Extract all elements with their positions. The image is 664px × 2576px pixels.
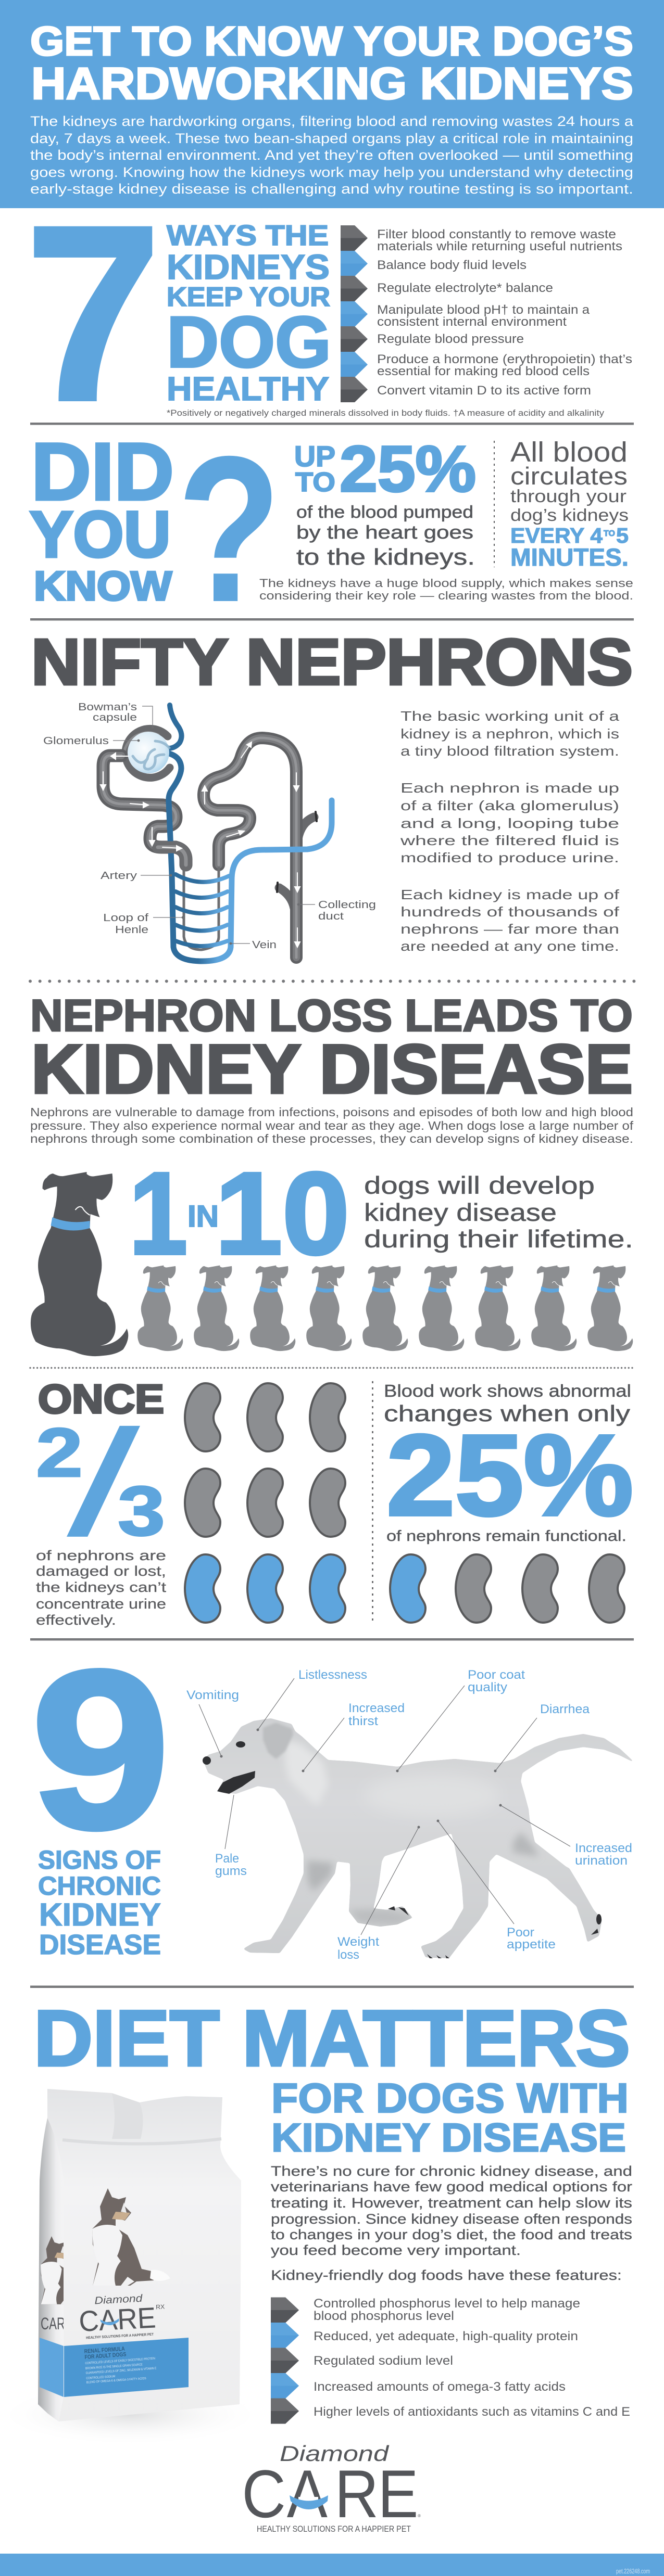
sign labels: Increased <box>348 1701 405 1715</box>
list of kidney functions: Regulate blood pressure <box>377 332 524 346</box>
blood work text: Blood work shows abnormal <box>384 1381 631 1400</box>
list of kidney functions: consistent internal environment <box>377 315 567 329</box>
nephron loss paragraph: pressure. They also experience normal wear and tear as they age. When dogs lose a large number of <box>30 1119 634 1132</box>
nephron loss paragraph: nephrons through some combination of these processes, they can develop signs of kidney disease. <box>30 1132 633 1145</box>
nephron loss paragraph: Nephrons are vulnerable to damage from infections, poisons and episodes of both low and high blood <box>30 1105 633 1119</box>
caption: nephrons damaged: concentrate urine <box>36 1596 166 1612</box>
stat: up to 25%: TO <box>295 467 335 498</box>
caption: nephrons damaged: effectively. <box>36 1612 116 1628</box>
heading: ways the kidneys keep your dog healthy <box>167 219 331 407</box>
stat caption: by the heart goes <box>296 521 473 543</box>
sign labels: Listlessness <box>298 1668 367 1682</box>
subheading: KIDNEY DISEASE <box>271 2115 626 2160</box>
caption: nephrons damaged: damaged or lost, <box>36 1563 166 1579</box>
stat: all blood circulates: through your <box>510 487 627 506</box>
stat: up to 25% <box>294 433 476 570</box>
diagram labels: Loop of <box>103 912 149 924</box>
heading: diet matters: DIET MATTERS <box>34 1994 630 2083</box>
subheading: FOR DOGS WITH <box>271 2075 629 2121</box>
bag side dog photo <box>41 2236 64 2304</box>
heading: once: ONCE <box>38 1376 164 1422</box>
big number 7: 7 <box>25 173 161 453</box>
header banner <box>0 0 664 208</box>
heading: ways the kidneys keep your dog healthy: KIDNEYS <box>167 248 330 287</box>
sign labels: quality <box>468 1680 507 1694</box>
stat: 1 in 10: IN <box>187 1200 219 1233</box>
diet paragraph: progression. Since kidney disease often responds <box>271 2211 632 2227</box>
diet paragraph: There’s no cure for chronic kidney disease, and <box>271 2163 632 2179</box>
intro paragraph: goes wrong. Knowing how the kidneys work may help you understand why detecting <box>30 164 633 180</box>
caption: nephrons damaged <box>36 1548 167 1628</box>
diet paragraph: treating it. However, treatment can help slow its <box>271 2195 632 2211</box>
nephron description: of a filter (aka glomerulus) <box>400 798 619 813</box>
bag blue label: CONTROLLED SODIUM <box>86 2375 115 2380</box>
intro paragraph: The kidneys are hardworking organs, filtering blood and removing wastes 24 hours a <box>30 113 634 129</box>
nephron description: modified to produce urine. <box>400 850 619 865</box>
stat: all blood circulates: TO <box>604 529 615 538</box>
dog eye, nose and paws <box>203 1741 602 1958</box>
caption: nephrons damaged: of nephrons are <box>36 1548 166 1563</box>
blood supply note: The kidneys have a huge blood supply, which makes sense <box>259 577 633 590</box>
flow arrows <box>101 742 300 947</box>
watermark: pet.226248.com <box>616 2567 650 2575</box>
diagram leader dots <box>137 726 299 945</box>
stat caption: during their lifetime. <box>364 1225 633 1253</box>
caption: nephrons damaged: the kidneys can’t <box>36 1579 167 1595</box>
stat: all blood circulates: EVERY 4 <box>510 524 603 547</box>
blood supply note <box>259 577 633 602</box>
sign leader lines <box>199 1678 570 1935</box>
arrow column <box>271 2297 299 2424</box>
stat caption: of nephrons remain functional. <box>386 1528 627 1545</box>
heading: signs of chronic kidney disease <box>38 1845 161 1960</box>
dog mouth <box>217 1771 255 1794</box>
list of diet features: Higher levels of antioxidants such as vitamins C and E <box>314 2405 630 2419</box>
bag blue label: RENAL FORMULA <box>84 2346 125 2355</box>
panel: nine signs <box>37 1668 632 1959</box>
diagram labels: capsule <box>93 712 137 723</box>
nephron description: where the filtered fluid is <box>400 833 619 848</box>
list of kidney functions <box>377 227 632 398</box>
nephron description: Each nephron is made up <box>400 780 619 796</box>
blood vessels <box>158 705 332 961</box>
stat: all blood circulates: All blood <box>510 437 628 468</box>
nephron description: kidney is a nephron, which is <box>400 726 619 742</box>
fraction: two thirds: 3 <box>118 1472 165 1550</box>
brand logo: HEALTHY SOLUTIONS FOR A HAPPIER PET <box>257 2524 411 2534</box>
fraction: two thirds: 2 <box>36 1414 83 1491</box>
sign labels: appetite <box>507 1937 556 1952</box>
nephron description: hundreds of thousands of <box>400 904 620 920</box>
arrow column <box>341 225 368 402</box>
sign labels: Poor coat <box>468 1668 525 1682</box>
bag side logo: CARE <box>41 2314 73 2333</box>
sign labels: Diarrhea <box>540 1702 590 1716</box>
list of kidney functions: Convert vitamin D to its active form <box>377 384 591 398</box>
stat: all blood circulates: dog’s kidneys <box>510 505 629 525</box>
stat: all blood circulates <box>510 437 629 571</box>
sign labels: Vomiting <box>186 1688 239 1702</box>
bag blue label: GUARANTEED LEVELS OF ZINC, SELENIUM & VITAMIN E <box>86 2367 157 2375</box>
icon: large dark dog <box>31 1172 128 1356</box>
brand logo: Diamond <box>280 2441 390 2466</box>
list of kidney functions: Produce a hormone (erythropoietin) that’s <box>377 352 632 366</box>
diagram labels: duct <box>318 911 344 922</box>
sign labels: loss <box>337 1948 359 1962</box>
list of kidney functions: Manipulate blood pH† to maintain a <box>377 303 590 317</box>
intro paragraph <box>30 113 634 197</box>
heading: signs of chronic kidney disease: KIDNEY <box>39 1897 161 1932</box>
blood work text: changes when only <box>384 1401 630 1426</box>
intro paragraph: the body’s internal environment. And yet they’re often overlooked — until something <box>30 147 633 163</box>
list of diet features: blood phosphorus level <box>314 2309 454 2323</box>
footnote: *Positively or negatively charged minerals dissolved in body fluids. †A measure of acidity and alkalinity <box>167 408 605 418</box>
panel: diet matters <box>0 1994 632 2534</box>
bag blue label <box>40 2338 189 2397</box>
stat: up to 25%: UP <box>294 440 335 473</box>
list of kidney functions: Regulate electrolyte* balance <box>377 281 553 295</box>
diagram leader lines <box>113 706 315 943</box>
dog shading <box>263 1723 539 1925</box>
fraction: two thirds <box>36 1399 165 1567</box>
blood supply note: considering their key role — clearing wastes from the blood. <box>259 589 633 602</box>
sign labels <box>186 1668 632 1962</box>
heading: did you know <box>30 427 174 609</box>
nephron description: The basic working unit of a <box>400 708 620 724</box>
glomerulus <box>128 732 169 773</box>
big number 9: 9 <box>31 1623 170 1876</box>
heading: did you know: YOU <box>30 499 171 571</box>
title: GET TO KNOW YOUR DOG’S <box>30 18 633 64</box>
heading: ways the kidneys keep your dog healthy: DOG <box>167 302 331 382</box>
stat: all blood circulates: MINUTES. <box>510 543 629 571</box>
intro paragraph: early-stage kidney disease is challenging and why routine testing is so important. <box>30 181 633 197</box>
dog photo <box>203 1718 635 1958</box>
bag blue label: BLEND OF OMEGA-6 & OMEGA-3 FATTY ACIDS <box>86 2377 146 2384</box>
nephron description <box>400 708 620 954</box>
list of diet features: Reduced, yet adequate, high-quality protein <box>314 2329 578 2343</box>
subheading <box>271 2075 629 2160</box>
list of diet features: Controlled phosphorus level to help manage <box>314 2297 580 2311</box>
stat: 1 in 10 <box>129 1149 349 1279</box>
nephron description: are needed at any one time. <box>400 938 619 954</box>
bag logo: Diamond <box>94 2293 143 2306</box>
product bag <box>38 2089 241 2430</box>
heading: nephron loss leads to kidney disease: NEPHRON LOSS LEADS TO <box>30 991 633 1041</box>
heading: did you know: KNOW <box>34 563 172 609</box>
big question mark: ? <box>177 413 281 645</box>
sign labels: Pale <box>215 1852 239 1866</box>
nephron diagram <box>101 705 332 961</box>
heading: did you know: DID <box>31 427 174 517</box>
panel: nifty nephrons <box>31 626 633 961</box>
stat caption: kidney disease <box>364 1198 557 1226</box>
diagram labels: Vein <box>252 939 277 951</box>
nephron description: Each kidney is made up of <box>400 887 620 902</box>
icon row: nine grey dogs <box>137 1266 633 1351</box>
title: HARDWORKING KIDNEYS <box>31 59 633 109</box>
intro paragraph: day, 7 days a week. These two bean-shaped organs play a critical role in maintaining <box>30 131 633 146</box>
stat: up to 25%: 25% <box>340 433 476 505</box>
diet paragraph <box>271 2163 632 2283</box>
stat caption: of the blood pumped <box>296 502 473 521</box>
title <box>30 18 633 109</box>
tubules <box>103 729 317 958</box>
sign labels: gums <box>215 1864 247 1878</box>
list of diet features: Increased amounts of omega-3 fatty acids <box>314 2380 566 2394</box>
heading: ways the kidneys keep your dog healthy: WAYS THE <box>167 219 329 251</box>
footer band <box>0 2554 664 2576</box>
sign labels: urination <box>575 1854 628 1868</box>
heading: signs of chronic kidney disease: CHRONIC <box>38 1871 161 1901</box>
diagram labels: Henle <box>115 924 148 936</box>
heading: ways the kidneys keep your dog healthy: HEALTHY <box>167 370 329 407</box>
diet paragraph: to changes in your dog’s diet, the food and treats <box>271 2227 632 2242</box>
bag logo: HEALTHY SOLUTIONS FOR A HAPPIER PET <box>86 2333 154 2340</box>
stat: 1 in 10: 10 <box>215 1149 349 1279</box>
heading: nifty nephrons: NIFTY NEPHRONS <box>31 626 633 698</box>
diet paragraph: you feed become very important. <box>271 2242 521 2258</box>
diet paragraph: Kidney-friendly dog foods have these features: <box>271 2267 622 2283</box>
stat: all blood circulates: 5 <box>616 524 629 547</box>
blood work text <box>384 1381 631 1426</box>
nephron description: nephrons — far more than <box>400 921 619 937</box>
heading: signs of chronic kidney disease: DISEASE <box>39 1929 161 1960</box>
nephron description: and a long, looping tube <box>400 815 619 831</box>
stat caption: dogs will develop <box>364 1171 595 1199</box>
sign labels: thirst <box>348 1714 378 1728</box>
stat caption: to the kidneys. <box>296 544 475 570</box>
panel: did you know <box>30 413 633 645</box>
diagram labels: Artery <box>101 870 137 882</box>
list of kidney functions: essential for making red blood cells <box>377 364 590 378</box>
list of kidney functions: Filter blood constantly to remove waste <box>377 227 616 241</box>
sign labels: Increased <box>575 1841 632 1855</box>
panel: two thirds of nephrons <box>36 1376 633 1628</box>
heading: signs of chronic kidney disease: SIGNS OF <box>38 1845 161 1874</box>
diagram labels: Bowman’s <box>78 702 137 713</box>
bag dog photo <box>92 2188 170 2286</box>
icon grid: nine kidneys <box>185 1383 345 1623</box>
diet paragraph: veterinarians have few good medical options for <box>271 2179 632 2195</box>
bag blue label: CONTROLLED LEVELS OF EASILY DIGESTIBLE PROTEIN <box>85 2357 155 2365</box>
list of diet features: Regulated sodium level <box>314 2354 453 2368</box>
heading: nephron loss leads to kidney disease: KIDNEY DISEASE <box>31 1031 633 1108</box>
diagram labels <box>43 702 376 951</box>
dog ear <box>263 1723 293 1759</box>
bag logo: RX <box>156 2303 165 2311</box>
list of kidney functions: materials while returning useful nutrients <box>377 239 622 253</box>
sign labels: Weight <box>337 1935 379 1949</box>
sign labels: Poor <box>507 1925 534 1940</box>
nephron loss paragraph <box>30 1105 634 1145</box>
stat caption <box>364 1171 633 1253</box>
diagram labels: Collecting <box>318 899 376 911</box>
heading: nephron loss leads to kidney disease <box>30 991 633 1108</box>
bag logo: CARE <box>78 2301 157 2338</box>
panel: nephron loss <box>30 991 634 1356</box>
stat caption <box>296 502 475 570</box>
diagram labels: Glomerulus <box>43 735 109 747</box>
panel: 7 ways <box>25 173 632 453</box>
fraction: two thirds: / <box>67 1399 141 1567</box>
bag blue label: FOR ADULT DOGS <box>84 2351 127 2361</box>
brand logo: ® <box>418 2514 421 2518</box>
stat: all blood circulates: circulates <box>510 462 628 490</box>
bag blue label: BROWN RICE IS THE SINGLE GRAIN SOURCE <box>85 2363 143 2370</box>
list of kidney functions: Balance body fluid levels <box>377 258 527 272</box>
heading: ways the kidneys keep your dog healthy: KEEP YOUR <box>167 282 330 312</box>
stat: 1 in 10: 1 <box>129 1149 187 1279</box>
brand logo: CARE <box>242 2456 418 2532</box>
icon row: four kidneys <box>390 1554 624 1623</box>
list of diet features <box>314 2297 630 2419</box>
stat: 25 percent: 25% <box>386 1411 633 1539</box>
nephron description: a tiny blood filtration system. <box>400 743 619 759</box>
